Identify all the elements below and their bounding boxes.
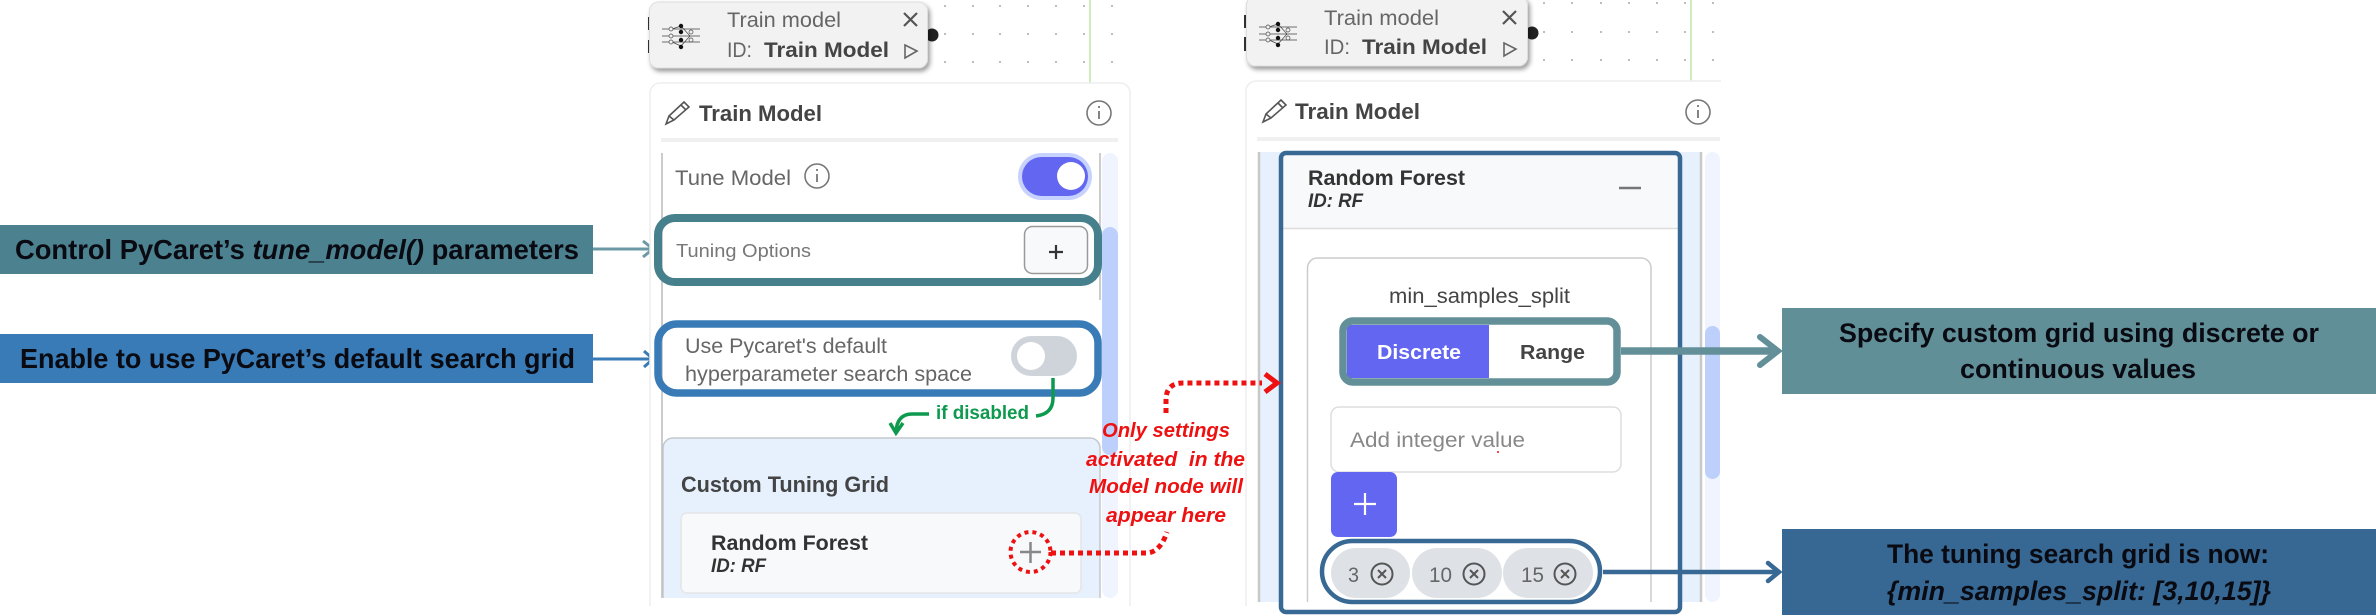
node: Train model (left): Train Model (764, 39, 889, 62)
callout: custom grid values (1782, 308, 2376, 394)
node: Train model (right): Train Model (1362, 36, 1487, 59)
canvas background: left dots and green edge (944, 0, 1113, 84)
icon: play (905, 45, 917, 58)
icon: info (1686, 100, 1710, 124)
pills: values: 15 (1521, 564, 1544, 587)
callout: tuning search grid: The tuning search grid is now: (1887, 539, 2269, 569)
icon: pencil (1263, 100, 1286, 122)
scrollbar (1705, 152, 1720, 602)
node: Train model (left) (648, 2, 938, 68)
callout: tuning search grid: {min_samples_split: [3,10,15]} (1887, 576, 2271, 606)
arrow: value pills to search grid callout (1603, 563, 1779, 581)
arrow: if disabled (890, 378, 1053, 433)
icon: pencil (666, 102, 689, 124)
row: Tuning Options (676, 226, 1088, 274)
heading: Train Model: Train Model (699, 101, 822, 126)
arrow: if disabled: if disabled (936, 403, 1029, 424)
card: Random Forest expanded (1281, 153, 1680, 612)
arrow: default grid callout to toggle (593, 351, 653, 367)
callout: default search grid (0, 334, 593, 383)
node: Train model (left): ID: (727, 39, 752, 62)
row: Tuning Options: Tuning Options (676, 241, 811, 261)
pills: values: 3 (1348, 564, 1359, 587)
row: default search space (685, 335, 1077, 386)
panel: Train Model settings (left) (650, 83, 1130, 606)
callout: tune_model parameters: Control PyCaret’s tune_model() parameters (15, 234, 579, 265)
icon: close (904, 13, 917, 26)
card: Random Forest: ID: RF (711, 556, 767, 577)
highlight: value pills (1322, 541, 1600, 602)
callout: default search grid: Enable to use PyCaret’s default search grid (20, 343, 575, 374)
card: Random Forest expanded: ID: RF (1308, 191, 1364, 212)
icon: close (1503, 11, 1516, 24)
segmented control: Discrete / Range (1347, 325, 1613, 378)
label: Tune Model: Tune Model (675, 167, 791, 190)
node: Train model (left): Train model (727, 9, 841, 32)
node: Train model (right): ID: (1324, 36, 1350, 59)
callout: custom grid values: Specify custom grid using discrete or (1839, 318, 2319, 348)
highlight: Random Forest card (1281, 153, 1680, 612)
annotation: only settings activated: appear here (1106, 505, 1226, 527)
highlight: Discrete Range control (1343, 321, 1617, 382)
pills: values: 10 (1429, 564, 1452, 587)
annotation: only settings activated: Only settings (1102, 420, 1230, 442)
annotation: red dotted connector from plus to right panel (1010, 374, 1277, 572)
card: Random Forest (681, 513, 1081, 593)
panel: Custom Tuning Grid: Custom Tuning Grid (681, 472, 889, 497)
panel: Train Model settings (right) (1246, 81, 1721, 612)
segmented control: Discrete / Range: Discrete (1377, 342, 1461, 364)
pills: values (1331, 548, 1593, 598)
icon: neural network (1259, 22, 1297, 47)
arrow: segmented control to custom grid callout (1621, 337, 1778, 365)
input: Add integer value (1331, 407, 1621, 472)
segmented control: Discrete / Range: Range (1520, 342, 1585, 364)
annotation: only settings activated: Model node will (1089, 476, 1243, 498)
icon: info (1087, 101, 1111, 125)
label: min_samples_split: min_samples_split (1389, 285, 1570, 308)
heading: Train Model: Train Model (1295, 99, 1420, 124)
icon: info (805, 164, 829, 188)
arrow: tune_model callout to tuning options (593, 241, 653, 257)
callout: custom grid values: continuous values (1960, 354, 2196, 384)
scrollbar (1102, 153, 1118, 598)
button: add value (1331, 472, 1397, 537)
annotation: only settings activated: activated in the (1086, 449, 1245, 471)
icon: play (1504, 43, 1516, 56)
row: default search space: hyperparameter search space (685, 363, 972, 386)
toggle: Tune Model on (1018, 153, 1092, 200)
icon: neural network (662, 24, 700, 49)
highlight: default search toggle (658, 324, 1098, 393)
annotation: only settings activated (1086, 420, 1245, 527)
callout: tuning search grid (1782, 529, 2376, 615)
card: Random Forest: Random Forest (711, 532, 868, 555)
node: Train model (right) (1244, 0, 1714, 82)
highlight: tuning options (658, 218, 1098, 282)
node: Train model (right): Train model (1324, 7, 1439, 30)
row: default search space: Use Pycaret's default (685, 335, 887, 358)
card: Random Forest expanded: Random Forest (1308, 167, 1465, 190)
input: Add integer value: Add integer value (1350, 429, 1525, 452)
callout: tune_model parameters (0, 225, 593, 274)
panel: Custom Tuning Grid (663, 438, 1100, 598)
